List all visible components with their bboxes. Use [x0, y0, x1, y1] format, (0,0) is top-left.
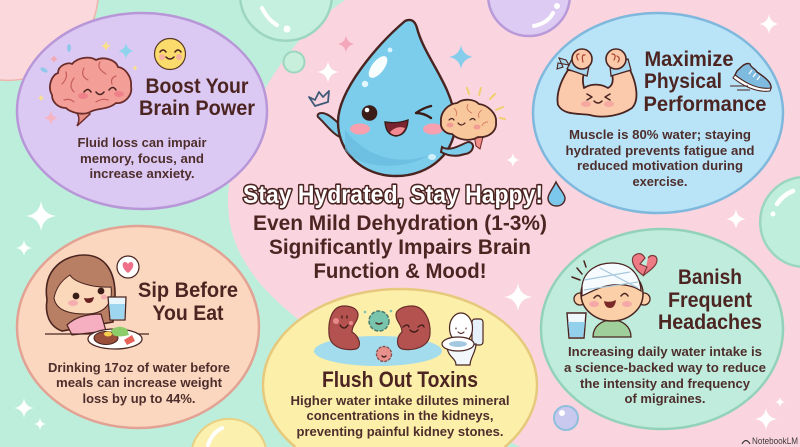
panel: sip before you eat: [17, 226, 259, 428]
bubble: small lavender: [554, 406, 578, 430]
drop shine: [345, 48, 436, 166]
icon: heart speech bubble: [117, 256, 139, 278]
subtitle: Significantly Impairs Brain: [269, 236, 531, 259]
heading: [139, 75, 255, 120]
body text: a science-backed way to reduce: [564, 360, 766, 375]
heading: Flush Out Toxins: [322, 367, 478, 392]
icon: smiley: [154, 38, 186, 70]
panel: physical performance: [533, 13, 783, 213]
title: Stay Hydrated, Stay Happy!: [243, 181, 543, 209]
bubble: pink top left: [0, 0, 98, 80]
body text: [566, 127, 755, 189]
icon: water drop mascot: [309, 20, 505, 176]
body text: [48, 360, 230, 406]
body text: the intensity and frequency: [580, 376, 751, 391]
icon: broken heart: [632, 254, 657, 276]
body text: Fluid loss can impair: [78, 135, 206, 150]
body text: Drinking 17oz of water before: [48, 360, 230, 375]
bubble: small mint ring: [284, 52, 304, 72]
bubble: yellow bottom: [192, 419, 266, 447]
panel: brain power: [17, 13, 267, 209]
icon: yellow rays: [467, 88, 505, 119]
icon: running shoe: [730, 63, 771, 91]
subtitle: Function & Mood!: [314, 260, 486, 283]
heading: Performance: [644, 93, 766, 116]
body text: loss by up to 44%.: [82, 391, 196, 406]
body text: [290, 393, 510, 439]
body text: memory, focus, and: [80, 151, 204, 166]
heading: Brain Power: [139, 97, 255, 120]
icon: green germ: [364, 310, 392, 331]
body text: increase anxiety.: [90, 166, 194, 181]
body text: Increasing daily water intake is: [568, 344, 762, 359]
right arm: [441, 142, 473, 156]
heading: Physical: [644, 70, 722, 93]
icon: girl with water and meal: [45, 255, 149, 349]
heading: [644, 48, 766, 116]
heading: Boost Your: [146, 75, 248, 98]
body text: meals can increase weight: [56, 375, 223, 390]
body text: concentrations in the kidneys,: [306, 408, 494, 423]
heading: [658, 266, 762, 334]
body text: Muscle is 80% water; staying: [569, 127, 751, 142]
face: [350, 105, 443, 136]
icon: left arm and crown: [309, 91, 342, 138]
body text: [78, 135, 206, 181]
heading: You Eat: [152, 302, 224, 325]
heading: [138, 279, 238, 325]
icon: sparkles around brain: [38, 41, 138, 125]
icon: pink germ: [376, 346, 392, 362]
icon: title water drop: [548, 182, 565, 206]
body text: hydrated prevents fatigue and: [566, 143, 755, 158]
background: pink wave: [228, 0, 800, 447]
bubble: mint top: [240, 0, 332, 41]
subtitle: [253, 212, 547, 283]
body text: Higher water intake dilutes mineral: [290, 393, 510, 408]
heading: Frequent: [668, 289, 752, 312]
icon: pink and blue sparkles: [338, 36, 473, 69]
panel: banish headaches: [541, 229, 783, 429]
icon: happy brain: [50, 58, 131, 126]
heading: Maximize: [644, 48, 734, 71]
body text: of migraines.: [624, 391, 706, 406]
heading: Sip Before: [138, 279, 238, 302]
heading: Headaches: [658, 311, 762, 334]
body text: exercise.: [632, 174, 688, 189]
panel: flush out toxins: [263, 289, 537, 447]
drop body: [338, 20, 455, 176]
icon: bandaged head and water: [567, 261, 650, 338]
subtitle: Even Mild Dehydration (1-3%): [253, 212, 547, 235]
bubble: mint right: [760, 177, 800, 267]
icon: smiling toilet: [442, 313, 483, 365]
bubble: purple top right: [488, 0, 570, 36]
icon: flexing muscle: [557, 49, 636, 117]
icon: small brain: [441, 100, 496, 149]
heading: Banish: [678, 266, 742, 289]
body text: preventing painful kidney stones.: [296, 424, 504, 439]
icon: kidneys in water: [314, 306, 442, 366]
body text: reduced motivation during: [577, 158, 743, 173]
body text: [564, 344, 766, 406]
